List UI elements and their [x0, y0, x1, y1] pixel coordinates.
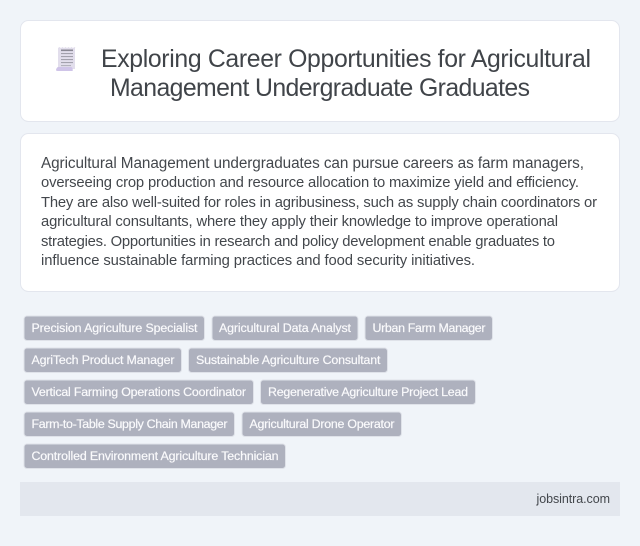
tag: Agricultural Drone Operator: [242, 412, 402, 436]
tag: Farm-to-Table Supply Chain Manager: [24, 412, 234, 436]
tag: Agricultural Data Analyst: Agricultural Data Analyst: [219, 321, 352, 335]
tag: Controlled Environment Agriculture Technician: Controlled Environment Agriculture Technician: [32, 449, 279, 463]
description text: overseeing crop production and resource allocation to maximize yield and efficiency.: [41, 175, 579, 191]
footer source text: jobsintra.com: [536, 492, 610, 506]
tag: Sustainable Agriculture Consultant: Sustainable Agriculture Consultant: [196, 353, 381, 367]
description text: They are also well-suited for roles in agribusiness, such as supply chain coordinators or: [41, 195, 597, 211]
tag: Urban Farm Manager: Urban Farm Manager: [372, 321, 486, 335]
description text: strategies. Opportunities in research and policy development enable graduates to: [41, 234, 555, 250]
tag: Regenerative Agriculture Project Lead: Regenerative Agriculture Project Lead: [268, 385, 468, 399]
panel: description: [20, 134, 620, 292]
title: Management Undergraduate Graduates: [110, 75, 530, 102]
tag: Urban Farm Manager: [365, 316, 492, 340]
tag: Regenerative Agriculture Project Lead: [260, 380, 476, 404]
icon: paper scroll document: [56, 47, 76, 71]
description text: agricultural consultants, where they apply their knowledge to improve operational: [41, 214, 558, 230]
tag: Precision Agriculture Specialist: [24, 316, 204, 340]
description text: Agricultural Management undergraduates can pursue careers as farm managers,: [41, 155, 584, 172]
tag: Precision Agriculture Specialist: Precision Agriculture Specialist: [32, 321, 198, 335]
title: [101, 46, 591, 102]
tag: Vertical Farming Operations Coordinator: [24, 380, 254, 404]
tag: AgriTech Product Manager: [24, 348, 182, 372]
tag: Agricultural Drone Operator: Agricultural Drone Operator: [250, 417, 394, 431]
panel: title: [20, 20, 620, 122]
description text: influence sustainable farming practices and food security initiatives.: [41, 253, 475, 269]
tag: AgriTech Product Manager: AgriTech Product Manager: [32, 353, 174, 367]
tag: Sustainable Agriculture Consultant: [188, 348, 388, 372]
footer bar: [20, 482, 620, 516]
tag: Vertical Farming Operations Coordinator: Vertical Farming Operations Coordinator: [32, 385, 246, 399]
description text: [41, 155, 597, 269]
tag: Controlled Environment Agriculture Technician: [24, 444, 286, 468]
tag: Farm-to-Table Supply Chain Manager: Farm-to-Table Supply Chain Manager: [32, 417, 228, 431]
tag list: [24, 316, 492, 468]
tag: Agricultural Data Analyst: [212, 316, 358, 340]
title: Exploring Career Opportunities for Agricultural: [101, 46, 591, 73]
